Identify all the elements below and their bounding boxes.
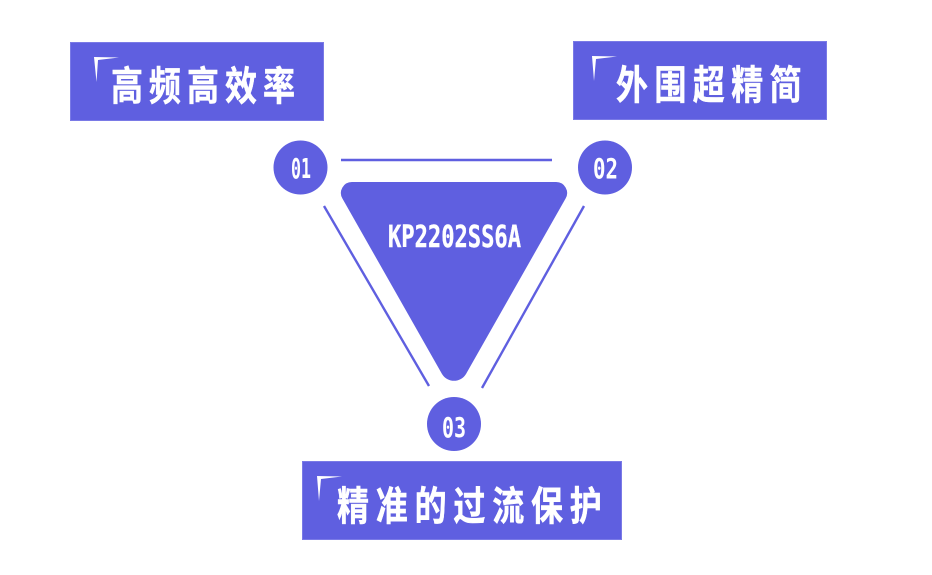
heading: 高频高效率: 高频高效率 [111, 64, 301, 109]
badge: 03 [427, 397, 481, 451]
badge: 01 [274, 140, 328, 194]
badge: 03: 03 [442, 411, 466, 444]
icon: corner mark 2 [592, 56, 617, 81]
panel: 精准的过流保护 [302, 462, 622, 540]
badge: 02: 02 [593, 152, 618, 185]
central triangle [341, 182, 567, 381]
label: KP2202SS6A: KP2202SS6A [388, 220, 521, 255]
icon: corner mark 1 [94, 57, 119, 82]
heading: 外围超精简: 外围超精简 [616, 63, 808, 108]
badge: 02 [578, 140, 632, 194]
heading: 精准的过流保护: 精准的过流保护 [337, 484, 609, 529]
connector line: 02 to 03 [482, 206, 584, 388]
panel: 外围超精简 [574, 42, 826, 120]
badge: 01: 01 [291, 152, 311, 185]
panel: 高频高效率 [70, 42, 324, 120]
connector line: 01 to 03 [324, 206, 429, 386]
icon: corner mark 3 [317, 476, 342, 501]
connector line: 01 to 02 [341, 159, 552, 161]
